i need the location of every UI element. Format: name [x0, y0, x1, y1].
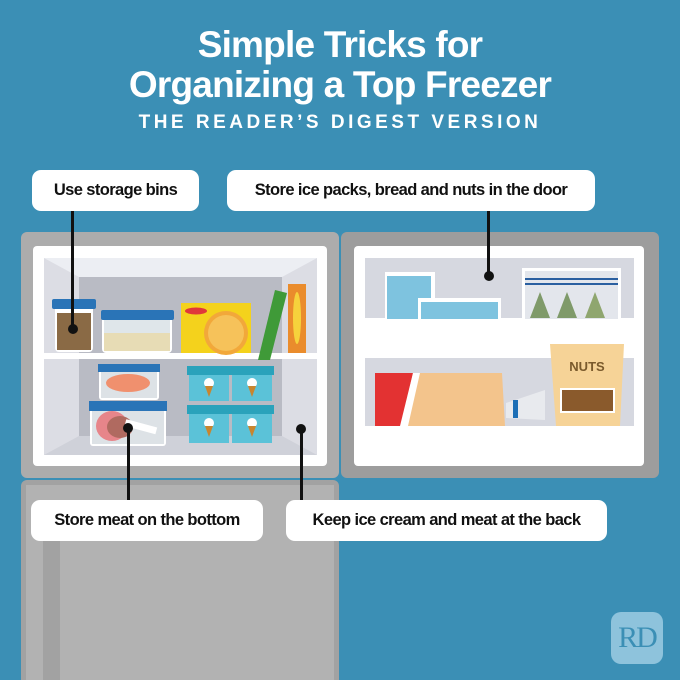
fridge bottom body: [21, 480, 339, 680]
title: Organizing a Top Freezer: [129, 64, 551, 105]
label: store meat: Store meat on the bottom: [54, 511, 240, 529]
ham container: [89, 401, 167, 446]
logo: RD: [611, 612, 663, 664]
title: [129, 24, 552, 133]
storage container: [101, 310, 174, 353]
bread: [375, 373, 545, 426]
label: store ice packs: [227, 170, 595, 211]
freezer door right: [341, 232, 659, 478]
salmon container: [98, 364, 160, 400]
logo: RD: RD: [618, 621, 656, 654]
label: use storage bins: Use storage bins: [54, 181, 177, 199]
nuts bag: NUTS: [569, 359, 605, 374]
connector lines: [71, 210, 74, 328]
ice packs: [385, 272, 501, 319]
storage bin jar: [52, 299, 96, 352]
herb bag: [522, 268, 621, 319]
dots: [68, 271, 494, 434]
label: store meat: [31, 500, 263, 541]
green box: [258, 284, 306, 360]
label: keep ice cream: Keep ice cream and meat at the back: [313, 511, 580, 529]
subtitle: THE READER’S DIGEST VERSION: [139, 112, 541, 133]
label: store ice packs: Store ice packs, bread and nuts in the door: [255, 181, 567, 199]
waffle box: [181, 303, 251, 355]
nuts bag: [550, 344, 624, 426]
title: Simple Tricks for: [198, 24, 482, 65]
ice cream tubs: [187, 366, 274, 443]
label: keep ice cream: [286, 500, 607, 541]
label: use storage bins: [32, 170, 199, 211]
